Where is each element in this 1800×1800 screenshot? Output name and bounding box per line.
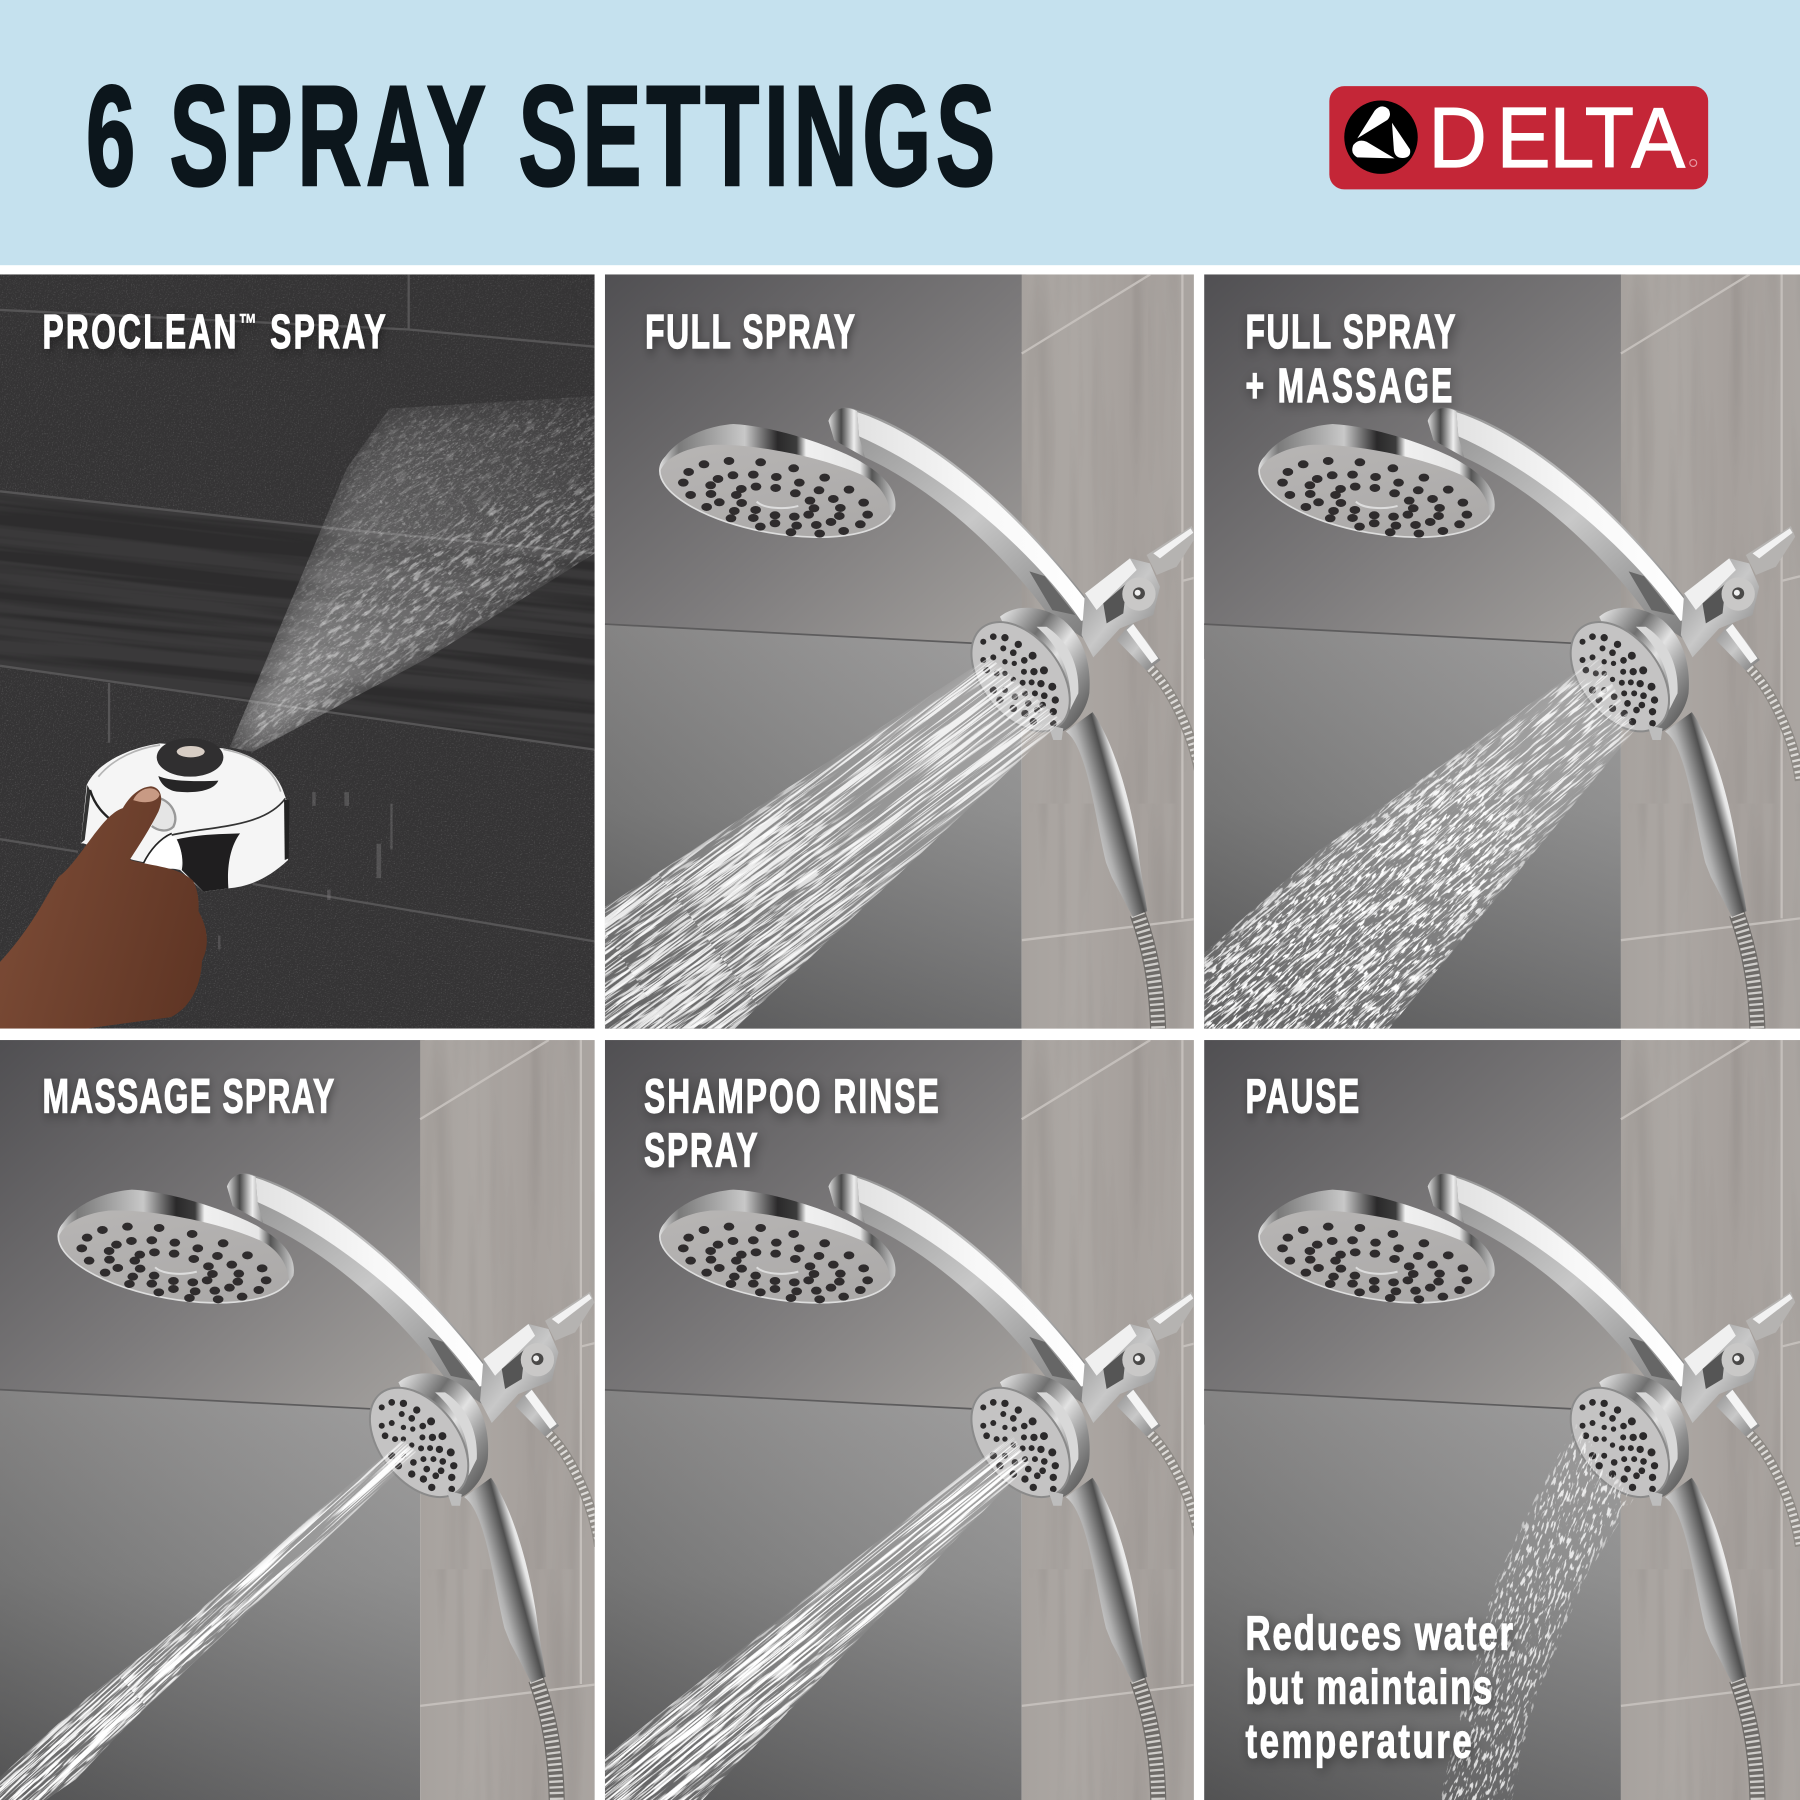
panel: ProClean spray (0, 274, 595, 1029)
panel: Shampoo rinse spray (602, 1040, 1201, 1800)
label (644, 1078, 942, 1174)
shower scene (602, 1040, 1201, 1800)
note text: temperature (1246, 1714, 1472, 1768)
label: PROCLEAN (42, 304, 237, 358)
panel: Massage spray (0, 1040, 599, 1800)
hand pressing button (0, 786, 207, 1029)
Delta logo (1329, 86, 1708, 189)
logo wordmark: DELTA (1429, 90, 1686, 185)
note text (1246, 1606, 1513, 1768)
label: SPRAY (259, 304, 386, 358)
label: MASSAGE SPRAY (42, 1069, 334, 1123)
note text: but maintains (1246, 1660, 1492, 1714)
water spray (1440, 1423, 1634, 1800)
water spray (605, 1435, 1030, 1800)
spray mist (230, 396, 595, 752)
note text: Reduces water (1246, 1606, 1513, 1660)
panel: Full spray + massage (1201, 274, 1800, 1034)
panel: Pause (1201, 1040, 1800, 1800)
shower scene (1201, 1040, 1800, 1800)
label (1246, 304, 1455, 412)
label: SPRAY (644, 1123, 758, 1177)
label: SHAMPOO RINSE (644, 1069, 939, 1123)
header band (0, 0, 1800, 265)
title: 6 SPRAY SETTINGS (86, 57, 995, 216)
water spray (605, 657, 1062, 1029)
panel: Full spray (602, 274, 1201, 1034)
icon: Delta emblem (1344, 100, 1418, 174)
label: + MASSAGE (1246, 358, 1452, 412)
shower scene (602, 274, 1201, 1034)
water spray (0, 1440, 418, 1800)
stone wall (0, 274, 595, 1029)
label: ™ (239, 308, 257, 339)
shower scene (1201, 274, 1800, 1034)
label: FULL SPRAY (1246, 304, 1455, 358)
water spray (1204, 657, 1636, 1029)
label: FULL SPRAY (645, 304, 855, 358)
chrome spray fixture (81, 738, 289, 892)
shower scene (0, 1040, 599, 1800)
label: PAUSE (1246, 1069, 1359, 1123)
